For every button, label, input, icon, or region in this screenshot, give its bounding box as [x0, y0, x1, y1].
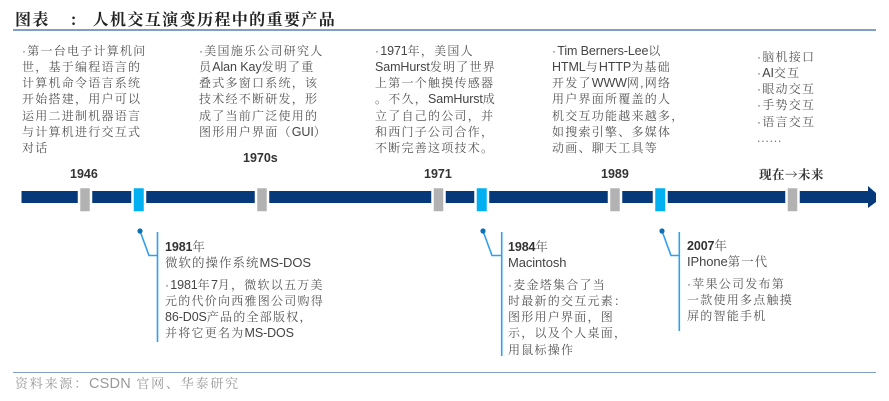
- callout text: 2007: 屏的智能手机: [687, 309, 767, 323]
- year label: 1946: 1946: [70, 167, 98, 181]
- callout: 2007: 2007年: [687, 239, 728, 253]
- callout text: 1981: [165, 278, 324, 340]
- text block: 1946: ·第一台电子计算机问: [22, 44, 146, 58]
- callout: 1981: 微软的操作系统MS-DOS: [165, 255, 311, 270]
- text block: 1971: 不断完善这项技术。: [375, 141, 494, 155]
- text block: 1946: 与计算机进行交互式: [22, 125, 141, 139]
- year label: 1989: 1989: [601, 167, 629, 181]
- text block: 1989: [552, 44, 685, 155]
- text block: 1970s: [199, 44, 327, 139]
- callout text: 1981: 86-D0S产品的全部版权，: [165, 310, 313, 324]
- timeline markers: [79, 187, 798, 212]
- text block: 1970s: 成了当前广泛使用的: [199, 109, 318, 123]
- title: 图表 : 人机交互演变历程中的重要产品: [15, 7, 336, 30]
- footer rule: [13, 372, 876, 373]
- text block: future: ·脑机接口: [757, 50, 815, 64]
- text block: 1946: 开始搭建，用户可以: [22, 92, 141, 106]
- callout text: 1984: 图形用户界面，图: [508, 310, 614, 324]
- text block: 1970s: ·美国施乐公司研究人: [199, 44, 324, 58]
- callout text: 1984: [508, 278, 627, 357]
- timeline arrow: [22, 186, 876, 208]
- text block: 1946: [22, 44, 146, 155]
- text block: 1989: 开发了WWW网,网络: [552, 76, 671, 90]
- text block: 1989: 机交互功能越来越多，: [552, 109, 685, 123]
- text block: future: ·AI交互: [757, 66, 800, 80]
- callout text: 1981: ·1981年7月，微软以五万美: [165, 278, 324, 292]
- callout: 1981: [165, 240, 311, 270]
- text block: 1970s: 图形用户界面（GUI）: [199, 125, 327, 139]
- text block: 1971: 立了自己的公司，并: [375, 109, 494, 123]
- text block: 1946: 运用二进制机器语言: [22, 109, 141, 123]
- callout text: 1981: 并将它更名为MS-DOS: [165, 326, 294, 340]
- callout text: 1984: ·麦金塔集合了当: [508, 278, 606, 292]
- year label: now to future: 现在→未来: [759, 165, 824, 183]
- text block: 1971: SamHurst发明了世界: [375, 60, 496, 74]
- header rule: [13, 29, 876, 30]
- callout: 1984: [508, 240, 566, 270]
- text block: future: ·语言交互: [757, 115, 815, 129]
- year label: 1970s: 1970s: [243, 151, 278, 165]
- year label: 1971: 1971: [424, 167, 452, 181]
- text block: 1971: 上第一个触摸传感器: [375, 76, 494, 90]
- text block: 1989: 如搜索引擎、多媒体: [552, 125, 671, 139]
- callout: 1984: 1984年: [508, 240, 549, 254]
- text block: 1946: 世，基于编程语言的: [22, 60, 141, 74]
- text block: 1946: 计算机命令语言系统: [22, 76, 141, 90]
- callout text: 2007: [687, 277, 793, 323]
- callout text: 2007: 一款使用多点触摸: [687, 293, 793, 307]
- text block: 1989: ·Tim Berners-Lee以: [552, 44, 662, 58]
- text block: 1946: 对话: [22, 141, 49, 155]
- text block: 1970s: 技术经不断研发，形: [199, 92, 318, 106]
- text block: 1971: 和西门子公司合作，: [375, 125, 494, 139]
- callout: 2007: IPhone第一代: [687, 254, 768, 269]
- text block: future: [757, 50, 815, 145]
- source note: 资料来源：CSDN 官网、华泰研究: [15, 376, 240, 392]
- callout text: 2007: ·苹果公司发布第: [687, 277, 785, 291]
- text block: future: ·手势交互: [757, 98, 815, 112]
- text block: 1989: 用户界面所覆盖的人: [552, 92, 671, 106]
- callout: 2007: [687, 239, 768, 269]
- callout text: 1984: 示，以及个人桌面，: [508, 326, 627, 340]
- text block: 1970s: 员Alan Kay发明了重: [199, 60, 315, 74]
- text block: future: ......: [757, 131, 782, 145]
- text block: 1970s: 叠式多窗口系统，该: [199, 76, 318, 90]
- callout: 1984: Macintosh: [508, 255, 566, 270]
- text block: 1971: 。不久，SamHurst成: [375, 92, 496, 106]
- callout text: 1981: 元的代价向西雅图公司购得: [165, 294, 324, 308]
- text block: future: ·眼动交互: [757, 82, 815, 96]
- callout text: 1984: 用鼠标操作: [508, 343, 574, 357]
- callout text: 1984: 时最新的交互元素：: [508, 294, 627, 308]
- text block: 1989: HTML与HTTP为基础: [552, 60, 671, 74]
- text block: 1971: ·1971年，美国人: [375, 44, 474, 58]
- callout: 1981: 1981年: [165, 240, 206, 254]
- text block: 1989: 动画、聊天工具等: [552, 141, 658, 155]
- text block: 1971: [375, 44, 496, 155]
